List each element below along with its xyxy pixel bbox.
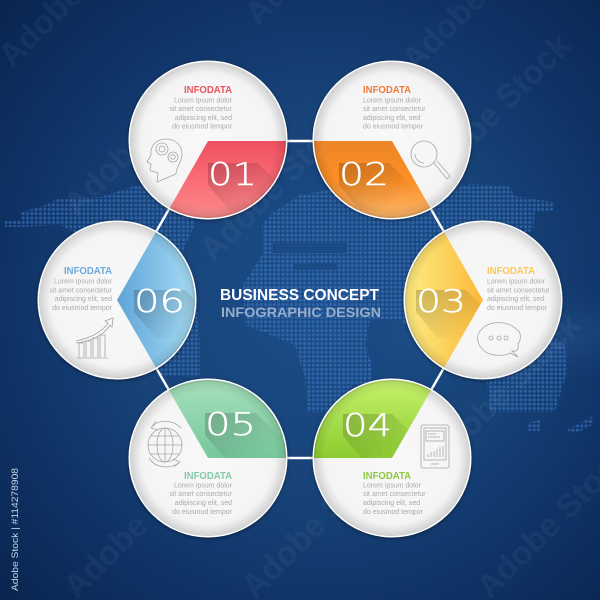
number 02: 02 xyxy=(339,157,389,193)
watermarks: Adobe Stock xyxy=(192,99,361,268)
body text: Lorem ipsum dolor xyxy=(487,278,546,286)
body text: do eiusmod tempor xyxy=(363,509,424,516)
heading: INFODATA xyxy=(184,470,232,482)
segment orange xyxy=(314,141,430,218)
body text: Lorem ipsum dolor xyxy=(174,482,233,490)
body text xyxy=(169,98,233,130)
panel: step 04 xyxy=(310,378,474,540)
body text: do eiusmod tempor xyxy=(487,305,548,312)
body text: adipiscing elit, sed xyxy=(487,296,544,303)
body text xyxy=(169,482,233,516)
watermarks: Adobe Stock xyxy=(234,436,403,600)
heading: INFODATA xyxy=(184,84,232,96)
icon: globe with arrows xyxy=(148,421,182,467)
title line 1: BUSINESS CONCEPT xyxy=(220,287,379,304)
body text: adipiscing elit, sed xyxy=(363,115,420,122)
heading: INFODATA xyxy=(64,265,112,277)
body text: do eiusmod tempor xyxy=(172,509,233,516)
panel: step 03 xyxy=(401,219,564,383)
icon: growth chart xyxy=(76,318,113,358)
panel: step 01 xyxy=(126,60,290,222)
body text: sit amet consectetur xyxy=(169,106,233,113)
watermarks: Adobe Stock xyxy=(56,436,225,600)
number 05: 05 xyxy=(205,407,256,443)
watermarks: Adobe Stock xyxy=(409,26,578,195)
body text: Lorem ipsum dolor xyxy=(174,98,233,104)
icon: head with gears xyxy=(147,139,182,182)
segment mint xyxy=(169,380,286,458)
icon: magnifier xyxy=(411,141,450,179)
heading: INFODATA xyxy=(363,470,411,482)
number 06: 06 xyxy=(134,284,185,320)
number shadow xyxy=(208,163,274,211)
credit line: Adobe Stock | #114278908 xyxy=(10,468,21,591)
watermarks: Adobe Stock xyxy=(419,306,588,475)
number 03: 03 xyxy=(416,284,466,320)
body text xyxy=(363,482,426,516)
body text: sit amet consectetur xyxy=(49,288,113,294)
body text: adipiscing elit, sed xyxy=(175,500,232,507)
icon: tablet xyxy=(421,425,449,468)
segment red xyxy=(170,141,286,218)
body text: adipiscing elit, sed xyxy=(175,115,232,122)
watermarks: Adobe Stock xyxy=(56,53,225,222)
body text: Lorem ipsum dolor xyxy=(363,98,422,104)
center title xyxy=(220,287,381,320)
icon: speech bubble xyxy=(478,323,520,357)
number 04: 04 xyxy=(343,408,392,444)
body text: Lorem ipsum dolor xyxy=(363,482,422,490)
body text: adipiscing elit, sed xyxy=(363,500,420,507)
panel: step 06 xyxy=(36,219,198,382)
body text: do eiusmod tempor xyxy=(172,124,233,130)
body text: sit amet consectetur xyxy=(363,106,426,113)
hexagon connector xyxy=(117,141,483,458)
body text: Lorem ipsum dolor xyxy=(54,278,113,286)
body text: do eiusmod tempor xyxy=(52,305,113,312)
dotted world map xyxy=(5,184,594,434)
number shadow xyxy=(134,290,195,338)
body text: sit amet consectetur xyxy=(363,491,426,498)
panel: step 05 xyxy=(126,378,290,540)
heading: INFODATA xyxy=(363,84,411,96)
segment yellow xyxy=(405,232,483,368)
number shadow xyxy=(343,414,408,458)
body text: do eiusmod tempor xyxy=(363,124,424,130)
body text: sit amet consectetur xyxy=(487,288,550,294)
heading: INFODATA xyxy=(487,265,535,277)
segment green xyxy=(314,380,431,458)
title line 2: INFOGRAPHIC DESIGN xyxy=(221,304,381,320)
number 01: 01 xyxy=(208,157,257,193)
number shadow xyxy=(416,290,480,338)
body text xyxy=(363,98,426,130)
panel: step 02 xyxy=(310,60,474,223)
body text: adipiscing elit, sed xyxy=(55,296,112,303)
number shadow xyxy=(339,163,415,211)
number shadow xyxy=(205,413,274,458)
body text: sit amet consectetur xyxy=(169,491,233,498)
segment blue xyxy=(117,232,195,368)
body text xyxy=(487,278,550,312)
body text xyxy=(49,278,113,312)
